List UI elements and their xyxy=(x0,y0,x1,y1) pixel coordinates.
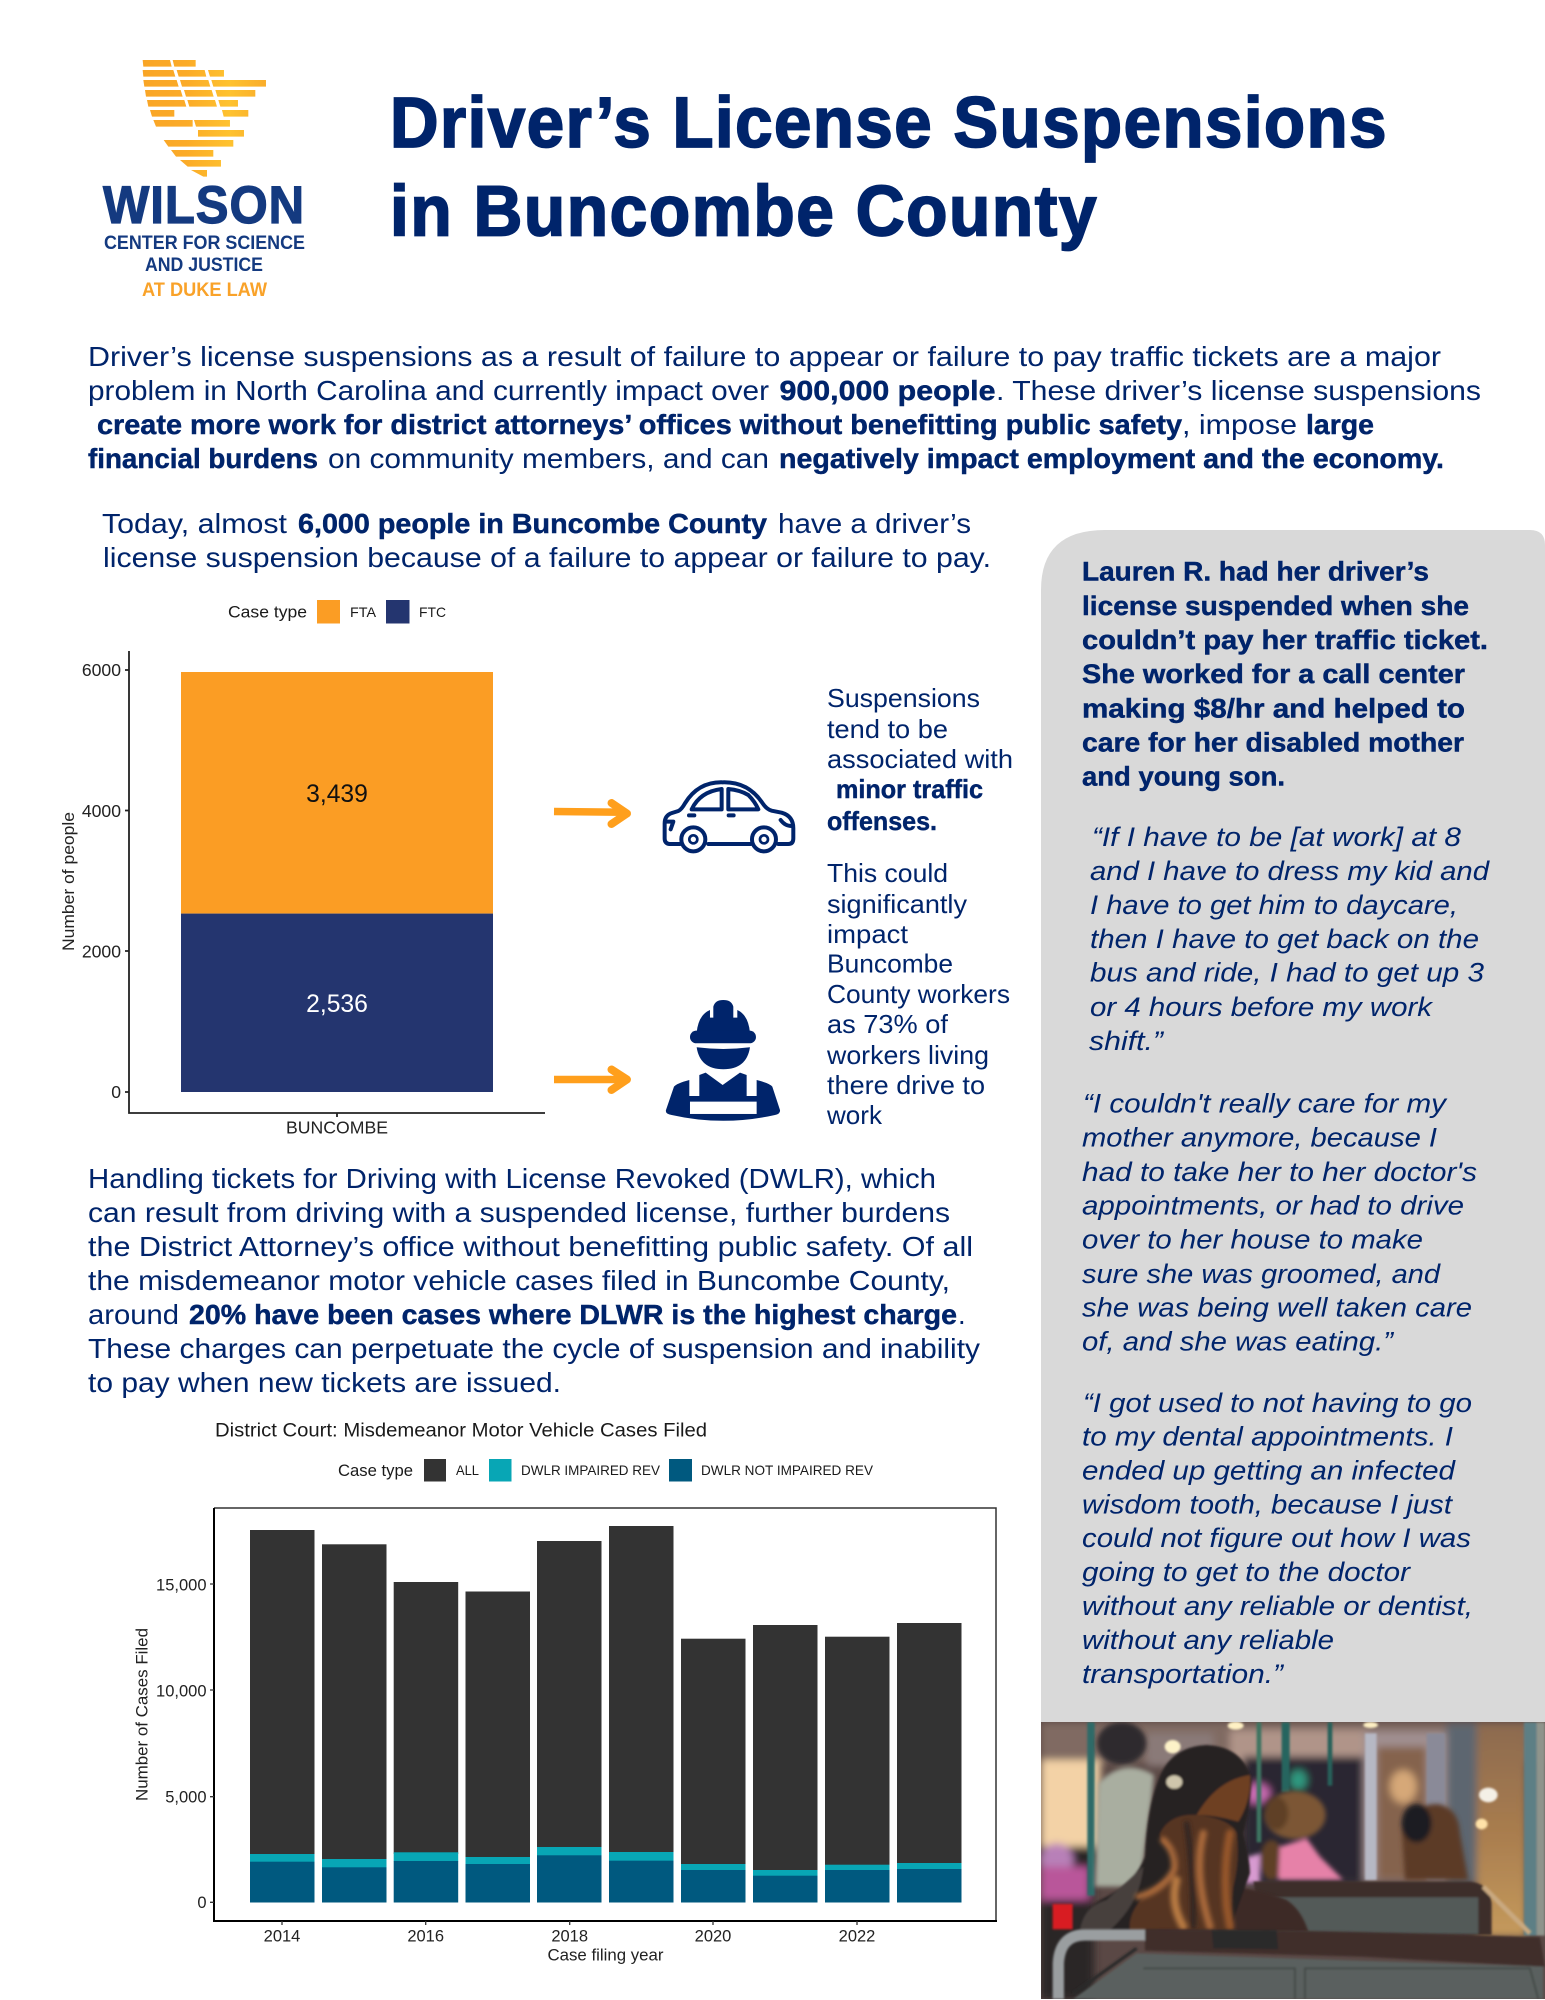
FTC bar segment xyxy=(181,914,493,1092)
icon: construction worker xyxy=(666,1000,780,1121)
y axis labels: 0 xyxy=(197,1894,206,1912)
logo subtitle: AND JUSTICE xyxy=(145,254,263,276)
DWLR impaired bars xyxy=(250,1847,962,1876)
chart legend: Case type xyxy=(338,1461,413,1480)
plot frame and ticks xyxy=(210,1508,997,1925)
DWLR paragraph: around xyxy=(88,1299,179,1330)
y axis labels xyxy=(156,1576,206,1912)
quote two: appointments, or had to drive xyxy=(1082,1190,1464,1220)
quote two: had to take her to her doctor's xyxy=(1082,1157,1477,1187)
side text: impact on workers: This could xyxy=(827,858,948,888)
DWLR paragraph: . xyxy=(958,1299,966,1330)
intro paragraph: Driver’s license suspensions as a result of failure to appear or failure to pay traffic tickets are a major xyxy=(88,341,1441,372)
quote three: ended up getting an infected xyxy=(1082,1456,1456,1486)
side text: impact on workers xyxy=(826,858,1010,1130)
side text: impact on workers: workers living xyxy=(826,1040,989,1070)
hair highlights xyxy=(1138,1823,1230,1927)
quote one: I have to get him to daycare, xyxy=(1090,890,1458,920)
quote three: without any reliable xyxy=(1082,1625,1334,1655)
DWLR paragraph: Handling tickets for Driving with License Revoked (DWLR), which xyxy=(88,1163,936,1194)
quote two: she was being well taken care xyxy=(1082,1292,1472,1322)
y axis labels: 0 xyxy=(111,1082,121,1102)
quote three: going to get to the doctor xyxy=(1082,1557,1411,1587)
x axis title: Case filing year xyxy=(548,1946,664,1964)
y axis title: Number of Cases Filed xyxy=(134,1628,152,1801)
woman: hair and jacket xyxy=(1080,1745,1308,1933)
panel: Lauren R. story xyxy=(1041,530,1545,1722)
quote two: mother anymore, because I xyxy=(1082,1122,1438,1152)
story intro: and young son. xyxy=(1082,762,1285,792)
y axis labels xyxy=(82,660,121,1102)
side text: minor traffic offenses: associated with xyxy=(827,744,1013,774)
x axis labels: 2014 xyxy=(264,1928,300,1946)
quote three: wisdom tooth, because I just xyxy=(1082,1490,1454,1520)
logo subtitle: AT DUKE LAW xyxy=(142,279,268,301)
intro paragraph: negatively impact employment and the economy. xyxy=(779,443,1444,474)
axes xyxy=(125,651,545,1117)
intro paragraph: on community members, and can xyxy=(328,443,769,474)
Buncombe County statement: license suspension because of a failure to appear or failure to pay. xyxy=(103,542,991,573)
x axis labels: 2020 xyxy=(695,1928,731,1946)
side text: minor traffic offenses: offenses. xyxy=(827,806,937,836)
bar chart: misdemeanor motor vehicle cases filed xyxy=(134,1420,997,1964)
side text: minor traffic offenses: tend to be xyxy=(827,714,948,744)
chart legend: DWLR NOT IMPAIRED REV xyxy=(701,1462,874,1478)
quote three: could not figure out how I was xyxy=(1082,1523,1471,1553)
quote one xyxy=(1089,822,1490,1056)
x axis labels: 2018 xyxy=(551,1928,588,1946)
icon: striped shield mark xyxy=(143,60,266,177)
logo wordmark: WILSON xyxy=(103,176,305,235)
arrow to worker xyxy=(554,1070,627,1090)
logo subtitle xyxy=(104,232,305,301)
DWLR paragraph: to pay when new tickets are issued. xyxy=(88,1367,561,1398)
side text: impact on workers: impact xyxy=(827,919,909,949)
x axis label: BUNCOMBE xyxy=(286,1118,388,1138)
side text: impact on workers: work xyxy=(826,1100,883,1130)
DWLR paragraph: the District Attorney’s office without benefitting public safety. Of all xyxy=(88,1231,973,1262)
side text: impact on workers: County workers xyxy=(827,979,1010,1009)
quote three: without any reliable or dentist, xyxy=(1082,1591,1473,1621)
Buncombe County statement: Today, almost xyxy=(102,508,287,539)
intro paragraph: . These driver’s license suspensions xyxy=(996,375,1481,406)
icon: car xyxy=(665,782,793,851)
y axis labels: 2000 xyxy=(82,942,121,962)
y axis labels: 15,000 xyxy=(156,1576,206,1594)
quote three xyxy=(1082,1388,1473,1689)
title: in Buncombe County xyxy=(390,172,1098,252)
quote two: sure she was groomed, and xyxy=(1082,1259,1441,1289)
quote three: transportation.” xyxy=(1082,1659,1284,1689)
y axis labels: 5,000 xyxy=(165,1788,206,1806)
photo: woman riding a bus xyxy=(1040,1722,1545,2000)
y axis labels: 10,000 xyxy=(156,1682,206,1700)
quote two: “I couldn't really care for my xyxy=(1083,1088,1448,1118)
x axis labels: 2022 xyxy=(839,1928,875,1946)
intro paragraph: 900,000 people xyxy=(780,375,996,406)
intro paragraph: financial burdens xyxy=(88,443,318,474)
side text: impact on workers: significantly xyxy=(827,889,967,919)
chart legend: FTC xyxy=(419,604,446,620)
quote two xyxy=(1082,1088,1477,1356)
side text: minor traffic offenses: Suspensions xyxy=(827,683,980,713)
bar chart: suspensions by case type xyxy=(59,600,545,1138)
quote three: “I got used to not having to go xyxy=(1083,1388,1472,1418)
title xyxy=(390,84,1388,252)
DWLR paragraph: can result from driving with a suspended license, further burdens xyxy=(88,1197,950,1228)
quote one: or 4 hours before my work xyxy=(1090,992,1434,1022)
Buncombe County statement: have a driver’s xyxy=(778,508,971,539)
background passengers xyxy=(1095,1722,1468,1887)
y axis labels: 6000 xyxy=(82,660,121,680)
intro paragraph: large xyxy=(1306,409,1374,440)
chart legend: FTA xyxy=(350,604,377,620)
intro paragraph: problem in North Carolina and currently impact over xyxy=(88,375,769,406)
chart legend xyxy=(228,600,446,624)
chart title: District Court: Misdemeanor Motor Vehicle Cases Filed xyxy=(215,1420,707,1442)
story intro: making $8/hr and helped to xyxy=(1082,694,1465,724)
second seat xyxy=(1253,1882,1530,1935)
chart legend: ALL xyxy=(456,1462,479,1478)
x axis labels: 2016 xyxy=(407,1928,444,1946)
logo subtitle: CENTER FOR SCIENCE xyxy=(104,232,305,254)
DWLR paragraph: the misdemeanor motor vehicle cases filed in Buncombe County, xyxy=(88,1265,950,1296)
quote two: of, and she was eating.” xyxy=(1082,1326,1394,1356)
quote one: then I have to get back on the xyxy=(1090,924,1479,954)
DWLR not impaired bars xyxy=(250,1855,962,1902)
story intro: She worked for a call center xyxy=(1082,659,1465,689)
value label FTC: 2,536 xyxy=(306,991,368,1018)
DWLR paragraph: 20% have been cases where DLWR is the highest charge xyxy=(189,1299,957,1330)
DWLR paragraph xyxy=(88,1163,980,1398)
intro paragraph: create more work for district attorneys’ offices without benefitting public safety xyxy=(97,409,1183,440)
story intro: couldn’t pay her traffic ticket. xyxy=(1082,625,1488,655)
arrow to car xyxy=(554,803,627,824)
chart legend xyxy=(338,1459,874,1482)
title: Driver’s License Suspensions xyxy=(390,84,1388,163)
first seat xyxy=(1058,1929,1545,1999)
side text: minor traffic offenses xyxy=(827,683,1013,836)
y axis labels: 4000 xyxy=(82,801,121,821)
quote one: and I have to dress my kid and xyxy=(1090,856,1490,886)
story intro xyxy=(1082,556,1488,792)
story intro: license suspended when she xyxy=(1082,591,1469,621)
story intro: Lauren R. had her driver’s xyxy=(1082,556,1429,586)
chart legend: DWLR IMPAIRED REV xyxy=(521,1462,661,1478)
Buncombe County statement: 6,000 people in Buncombe County xyxy=(298,508,768,539)
quote two: over to her house to make xyxy=(1082,1224,1423,1254)
side text: impact on workers: as 73% of xyxy=(827,1009,949,1039)
intro paragraph xyxy=(88,341,1481,474)
y axis title: Number of people xyxy=(59,812,78,951)
ALL bars xyxy=(250,1526,962,1871)
logo: Wilson Center for Science and Justice at Duke Law xyxy=(103,60,305,301)
intro paragraph: , impose xyxy=(1182,409,1297,440)
panel background xyxy=(1041,530,1545,1722)
quote one: bus and ride, I had to get up 3 xyxy=(1090,958,1484,988)
value label FTA: 3,439 xyxy=(306,781,368,808)
quote one: shift.” xyxy=(1089,1026,1164,1056)
x axis labels xyxy=(264,1928,875,1946)
chart legend: Case type xyxy=(228,602,307,622)
quote three: to my dental appointments. I xyxy=(1082,1422,1454,1452)
quote one: “If I have to be [at work] at 8 xyxy=(1092,822,1461,852)
story intro: care for her disabled mother xyxy=(1082,728,1464,758)
FTA bar segment xyxy=(181,672,493,914)
DWLR paragraph: These charges can perpetuate the cycle of suspension and inability xyxy=(88,1333,980,1364)
Buncombe County statement xyxy=(102,508,991,573)
side text: impact on workers: there drive to xyxy=(827,1070,985,1100)
side text: minor traffic offenses: minor traffic xyxy=(836,774,983,804)
side text: impact on workers: Buncombe xyxy=(827,948,953,978)
